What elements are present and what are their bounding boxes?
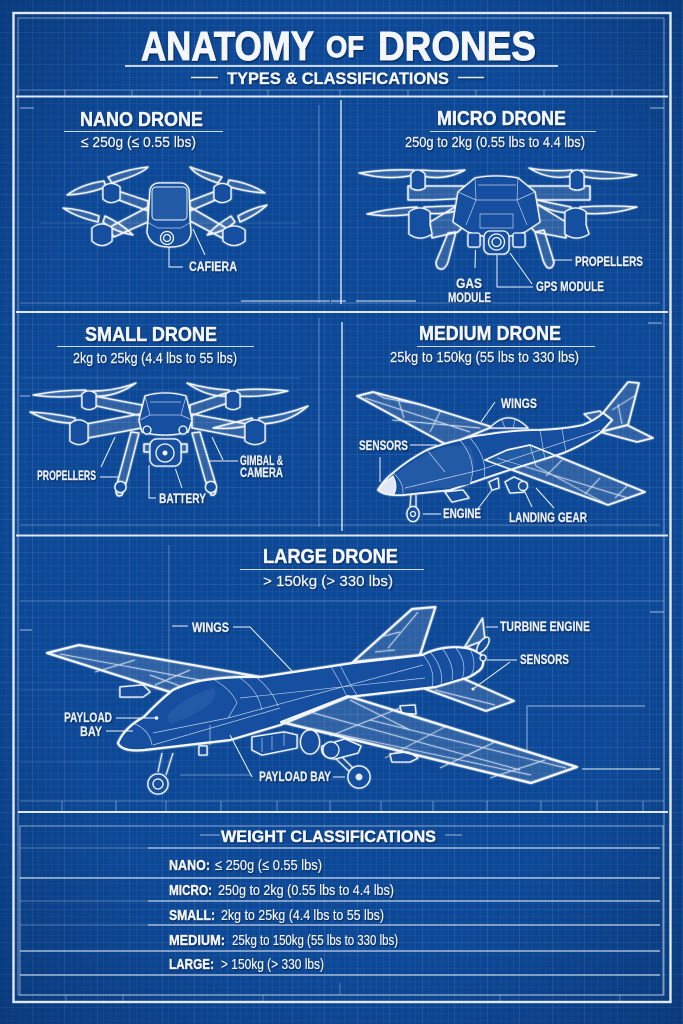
panel: nano drone xyxy=(63,109,267,274)
weight range: 2kg to 25kg (4.4 lbs to 55 lbs) xyxy=(73,350,237,367)
subtitle: TYPES & CLASSIFICATIONS xyxy=(227,70,449,88)
row: medium xyxy=(169,932,398,949)
nano drone illustration xyxy=(63,167,267,247)
weight range: > 150kg (> 330 lbs) xyxy=(263,573,393,590)
table rules xyxy=(20,835,660,1002)
title xyxy=(141,23,536,69)
panel: weight classifications xyxy=(20,826,663,1002)
row: micro: MICRO: xyxy=(169,882,212,899)
callout: gimbal and camera: CAMERA xyxy=(240,465,283,480)
title: DRONES xyxy=(378,23,536,69)
callout: landing gear: LANDING GEAR xyxy=(509,510,587,525)
callout: gimbal and camera xyxy=(208,437,283,480)
row: medium: MEDIUM: xyxy=(169,932,225,949)
callout: camera: CAFIERA xyxy=(189,259,237,274)
callout: gas module xyxy=(448,250,491,305)
row: nano: NANO: xyxy=(169,857,210,874)
callout: turbine engine: TURBINE ENGINE xyxy=(500,619,590,634)
callout: turbine engine xyxy=(486,619,590,634)
callout: camera xyxy=(169,229,237,274)
heading rule xyxy=(430,130,596,132)
callout: propellers: PROPELLERS xyxy=(575,254,643,269)
row: small xyxy=(169,907,384,924)
heading: large drone: LARGE DRONE xyxy=(263,546,398,568)
callout: propellers xyxy=(37,437,118,483)
heading rule xyxy=(64,130,223,132)
callout: payload bay bottom: PAYLOAD BAY xyxy=(259,769,331,784)
large drone illustration xyxy=(47,607,577,794)
heading: micro drone: MICRO DRONE xyxy=(437,108,566,130)
callout: wings xyxy=(481,396,537,422)
callout: gas module: MODULE xyxy=(448,290,491,305)
micro drone illustration xyxy=(359,168,637,269)
callout: wings: WINGS xyxy=(501,396,537,411)
callout: gps module xyxy=(497,253,604,294)
heading: nano drone: NANO DRONE xyxy=(80,109,203,131)
heading rule xyxy=(240,568,424,570)
callout: battery xyxy=(149,465,206,506)
callout: battery: BATTERY xyxy=(159,491,206,506)
weight range: 25kg to 150kg (55 lbs to 330 lbs) xyxy=(390,349,579,366)
row: large: LARGE: xyxy=(169,956,214,973)
callout: engine xyxy=(423,490,492,521)
row: nano: ≤ 250g (≤ 0.55 lbs) xyxy=(215,857,322,874)
row: nano xyxy=(169,857,322,874)
callout: landing gear xyxy=(509,488,587,525)
small drone illustration xyxy=(30,383,308,496)
heading: medium drone: MEDIUM DRONE xyxy=(419,323,561,345)
callout: engine: ENGINE xyxy=(443,506,481,521)
callout: propellers xyxy=(552,254,643,269)
panel: small drone xyxy=(30,324,308,506)
title: ANATOMY xyxy=(141,23,314,69)
callout: payload bay left: PAYLOAD xyxy=(64,710,112,725)
row: large: > 150kg (> 330 lbs) xyxy=(221,956,324,973)
panel: micro drone xyxy=(359,108,643,305)
heading: small drone: SMALL DRONE xyxy=(85,324,217,346)
title underline xyxy=(125,65,558,67)
panel: large drone xyxy=(47,546,590,794)
weight range: ≤ 250g (≤ 0.55 lbs) xyxy=(81,134,196,151)
row: micro: 250g to 2kg (0.55 lbs to 4.4 lbs) xyxy=(218,882,394,899)
callout: payload bay bottom xyxy=(180,735,345,784)
row: small: 2kg to 25kg (4.4 lbs to 55 lbs) xyxy=(221,907,384,924)
panel: medium drone xyxy=(357,323,653,525)
heading rule xyxy=(417,346,595,348)
row: small: SMALL: xyxy=(169,907,215,924)
callout: gas module: GAS xyxy=(456,276,482,291)
callout: sensors xyxy=(472,652,569,690)
callout: gimbal and camera: GIMBAL & xyxy=(240,453,283,468)
callout: sensors xyxy=(359,438,437,482)
weight range: 250g to 2kg (0.55 lbs to 4.4 lbs) xyxy=(405,134,585,151)
row: micro xyxy=(169,882,394,899)
callout: sensors: SENSORS xyxy=(520,652,569,667)
medium drone illustration xyxy=(357,382,653,522)
callout: payload bay left: BAY xyxy=(80,724,102,739)
panel outline xyxy=(20,826,663,995)
row: medium: 25kg to 150kg (55 lbs to 330 lbs) xyxy=(232,932,398,949)
panel heading: WEIGHT CLASSIFICATIONS xyxy=(221,827,436,846)
row: large xyxy=(169,956,324,973)
callout: sensors: SENSORS xyxy=(359,438,408,453)
heading rule xyxy=(57,346,254,348)
title: OF xyxy=(326,31,364,64)
callout: wings xyxy=(172,620,292,671)
callout: gps module: GPS MODULE xyxy=(536,279,604,294)
callout: propellers: PROPELLERS xyxy=(37,468,96,483)
callout: wings: WINGS xyxy=(192,620,229,635)
callout: payload bay left xyxy=(64,710,158,739)
